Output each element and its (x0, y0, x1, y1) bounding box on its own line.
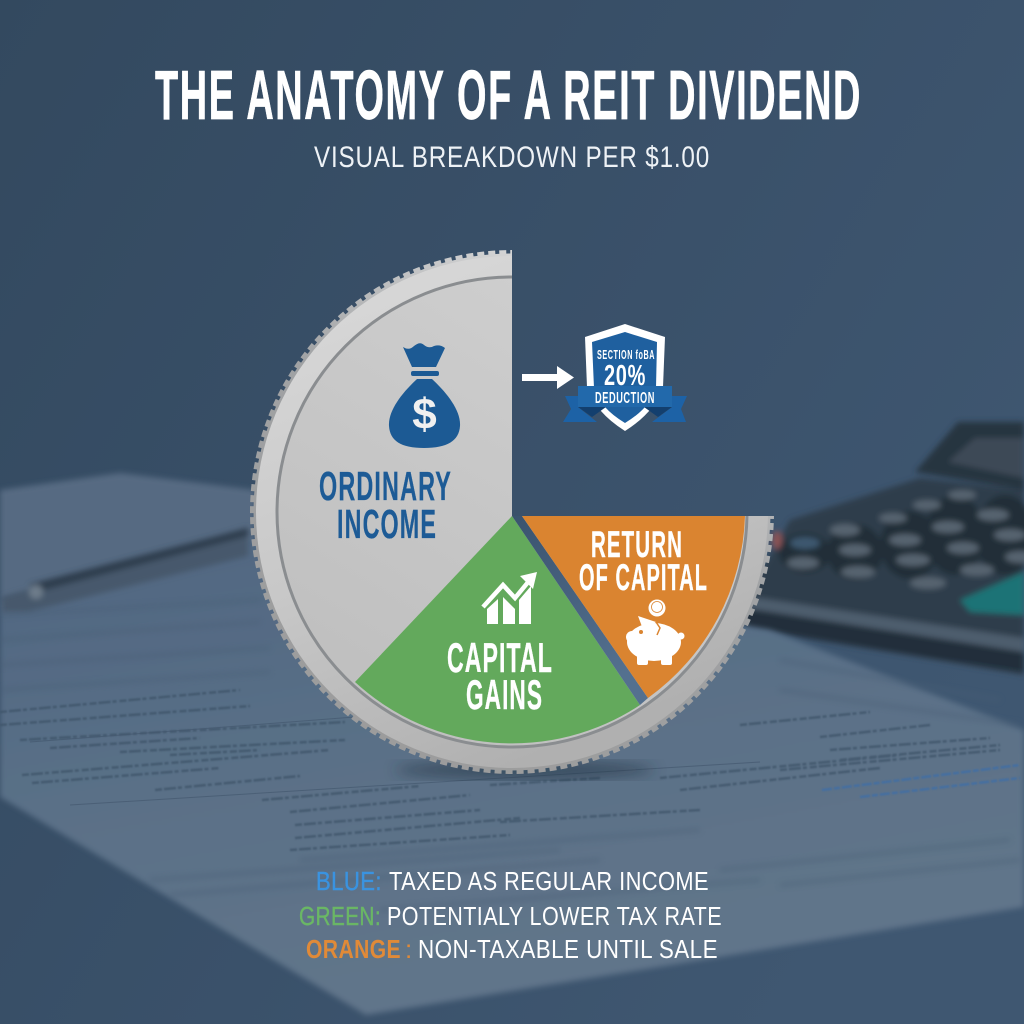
slice gap (512, 516, 648, 705)
background: blurred pen (2, 527, 248, 612)
legend row: orange: NON-TAXABLE UNTIL SALE (418, 934, 718, 964)
badge text: DEDUCTION (595, 390, 655, 407)
badge text: 20% (604, 360, 646, 392)
legend row: orange: : (405, 934, 413, 964)
coin reeded edge (252, 252, 772, 772)
background: document text lines (0, 600, 1020, 910)
background: blurred rear sheet of paper (0, 473, 255, 600)
label: ordinary income: ORDINARY (319, 463, 452, 509)
icon: money bag: $ (412, 390, 437, 439)
badge text: SECTION foBA (597, 347, 655, 362)
background: blurred main document (0, 540, 1024, 1015)
label: capital gains: GAINS (466, 671, 543, 718)
label: capital gains (448, 642, 552, 710)
label: return of capital: RETURN (591, 524, 683, 565)
legend row: green (299, 901, 722, 931)
label: return of capital: OF CAPITAL (579, 557, 708, 598)
slice: capital gains (355, 516, 640, 743)
legend row: blue: TAXED AS REGULAR INCOME (389, 866, 709, 896)
icon: rising chart (483, 572, 537, 624)
legend row: orange: ORANGE (306, 934, 401, 964)
background: blurred calculator (745, 422, 1024, 675)
label: ordinary income: INCOME (337, 501, 437, 547)
arrow to deduction badge (522, 366, 574, 389)
badge text (595, 347, 655, 407)
legend row: green: GREEN: (299, 901, 381, 931)
legend row: green: POTENTIALY LOWER TAX RATE (387, 901, 722, 931)
panel: coin pie chart (252, 252, 772, 772)
slice: return of capital (522, 516, 745, 698)
label: ordinary income (320, 471, 451, 539)
coin contact shadow (395, 761, 655, 779)
coin inner groove (277, 277, 747, 747)
icon: money bag (389, 343, 460, 448)
legend row: blue: BLUE: (316, 866, 382, 896)
badge: section deduction shield (563, 324, 687, 431)
label: capital gains: CAPITAL (447, 634, 553, 681)
legend (299, 866, 722, 964)
coin face (256, 256, 768, 768)
legend row: orange (306, 934, 718, 964)
label: return of capital (580, 531, 706, 590)
subtitle: VISUAL BREAKDOWN PER $1.00 (314, 141, 710, 174)
icon: piggy bank (626, 600, 684, 665)
